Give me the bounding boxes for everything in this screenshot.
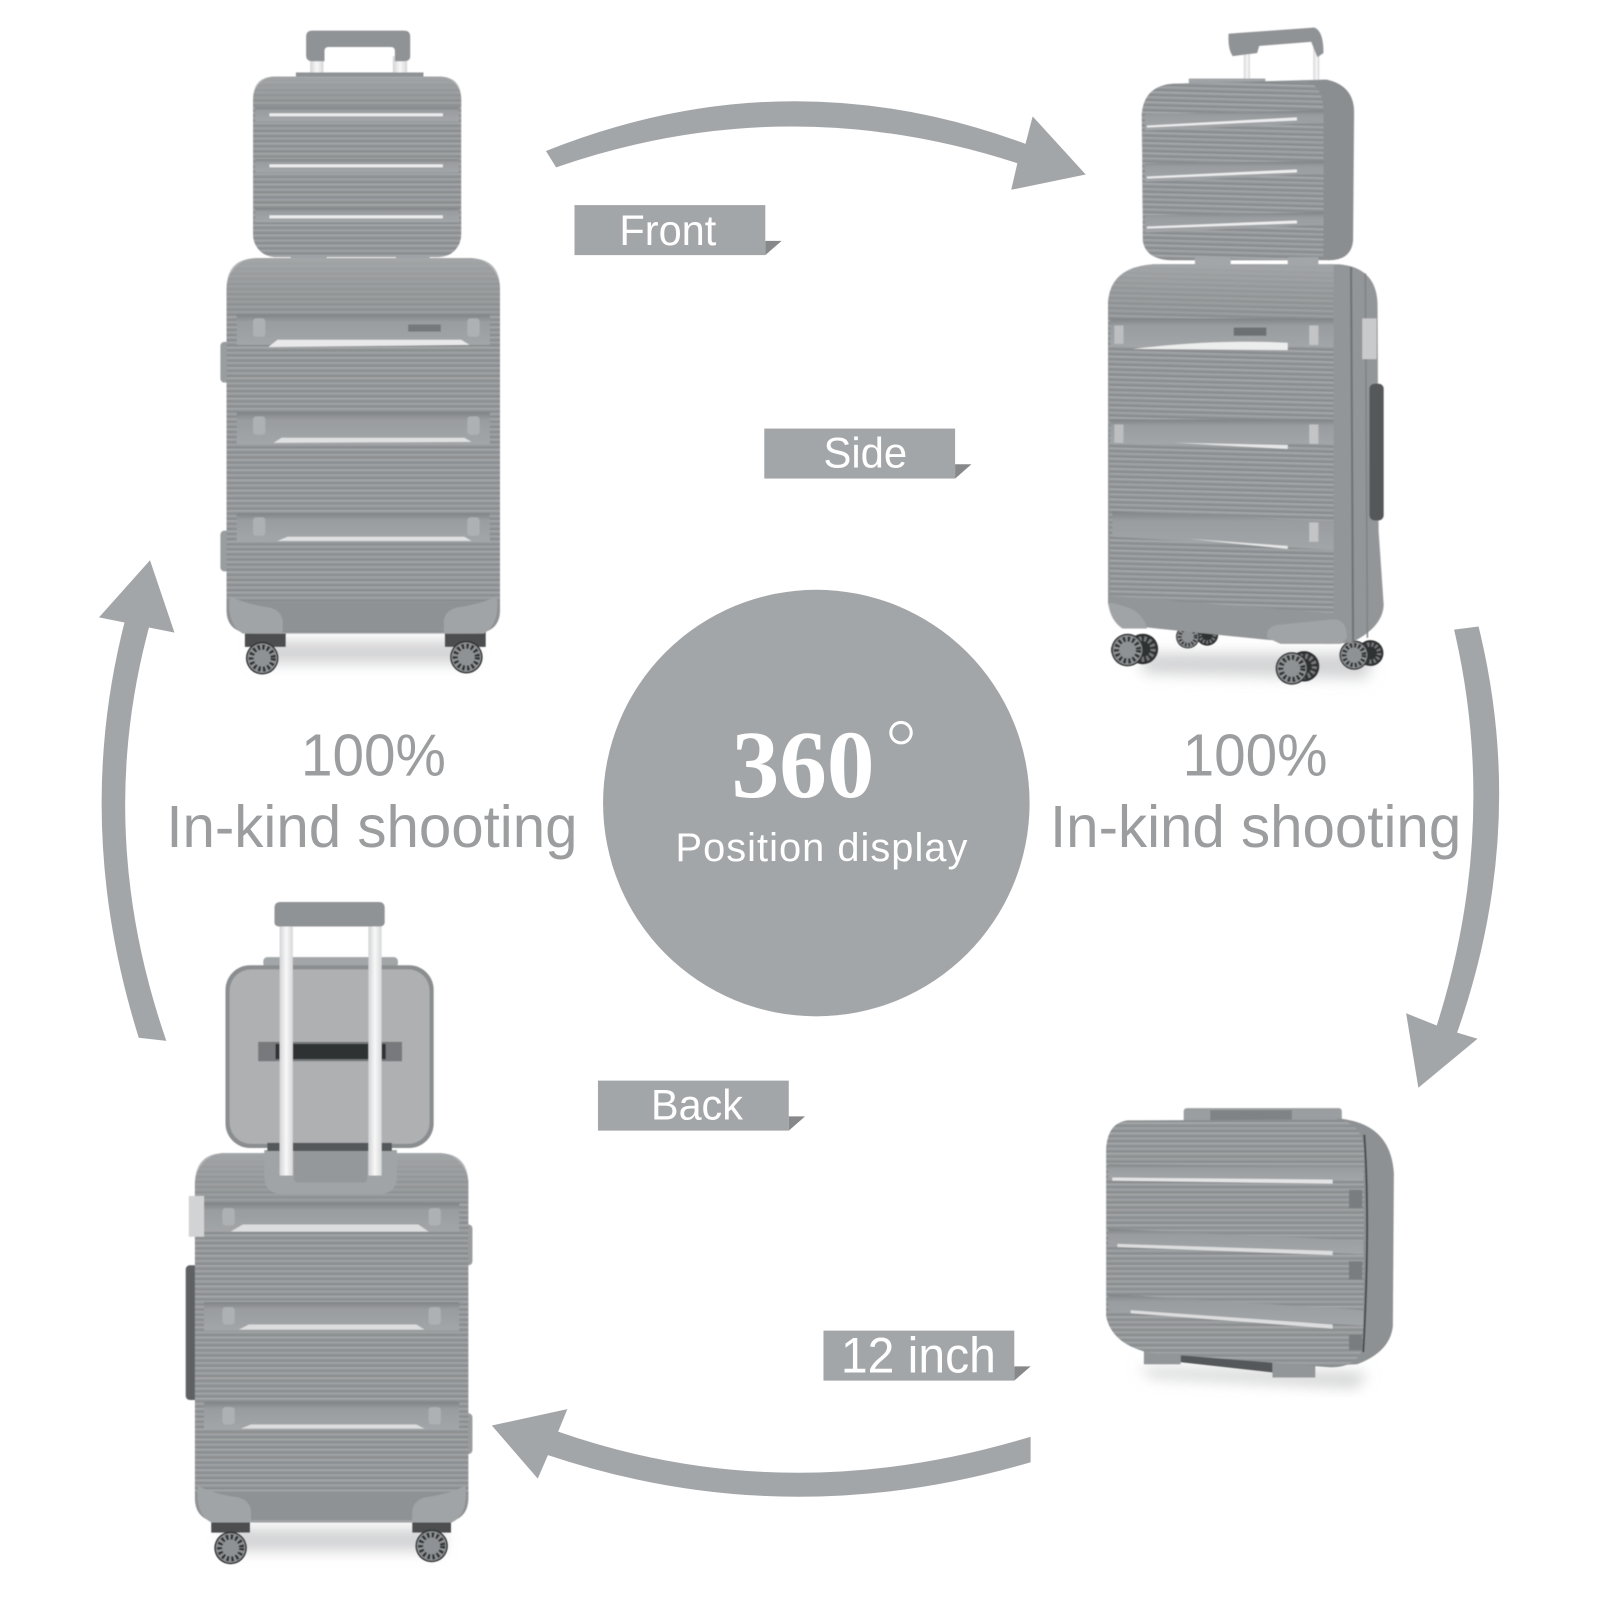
ground shadow [224, 1529, 444, 1551]
luggage set: side view [1108, 28, 1384, 685]
wheels [1111, 624, 1383, 685]
telescopic handle [1228, 28, 1323, 84]
combination lock [189, 1196, 204, 1237]
label: Front: Front [619, 207, 716, 255]
label: Side: Side [823, 429, 907, 477]
telescopic handle [306, 31, 410, 79]
ground shadow [255, 641, 474, 663]
text block: right 100% in-kind shooting: 100% [1183, 722, 1328, 789]
cabin suitcase body [227, 258, 500, 634]
casters and wheels [245, 631, 486, 674]
side carry handle [1369, 384, 1384, 520]
label: Back [598, 1081, 805, 1131]
text block: right 100% in-kind shooting [1050, 722, 1461, 860]
luggage set: back view [186, 902, 472, 1564]
ground shadow [1143, 653, 1372, 679]
trolley poles and grip [274, 902, 385, 1176]
trolley housing [264, 1150, 397, 1194]
side panel [1337, 1118, 1394, 1365]
ground shadow [1138, 1367, 1367, 1388]
subheading: position display: Position display [676, 826, 967, 870]
combination lock [1362, 318, 1377, 359]
luggage set: front view [220, 31, 500, 674]
label: Side [764, 429, 971, 479]
arrow: left, back to front [99, 560, 174, 1041]
side bumpers [462, 1224, 472, 1265]
heading: 360: 360 [732, 712, 874, 818]
cabin suitcase body [1108, 264, 1384, 644]
arrow: right, side to 12 inch [1406, 627, 1499, 1088]
top handle [1184, 1108, 1342, 1122]
seam [1363, 1135, 1367, 1352]
label: 12 inch: 12 inch [841, 1327, 996, 1383]
text block: left 100% in-kind shooting [166, 722, 578, 860]
luggage strap [258, 1042, 402, 1061]
cosmetic case back [226, 957, 434, 1151]
text block: left 100% in-kind shooting: 100% [301, 722, 446, 789]
label: Front [574, 205, 782, 255]
text block: right 100% in-kind shooting: In-kind shooting [1050, 793, 1461, 860]
text block: left 100% in-kind shooting: In-kind shooting [166, 793, 578, 860]
label: Back: Back [651, 1081, 743, 1129]
arrow: top, front to side [546, 101, 1086, 190]
side carry handle [186, 1265, 200, 1400]
cosmetic case [1142, 79, 1354, 265]
wheel housing [1267, 619, 1347, 644]
cabin suitcase body [189, 1150, 468, 1522]
side bumpers [220, 342, 233, 383]
arrow: bottom, 12 inch to back [492, 1409, 1031, 1497]
center circle: 360 position display [603, 590, 1030, 1016]
cosmetic case: 12 inch [1106, 1108, 1394, 1388]
wheels [211, 1518, 451, 1564]
feet [1144, 1347, 1315, 1378]
cosmetic case [253, 72, 461, 260]
front shell [1106, 1119, 1364, 1367]
shell recess bands [1108, 1164, 1363, 1350]
degree symbol [891, 722, 911, 743]
